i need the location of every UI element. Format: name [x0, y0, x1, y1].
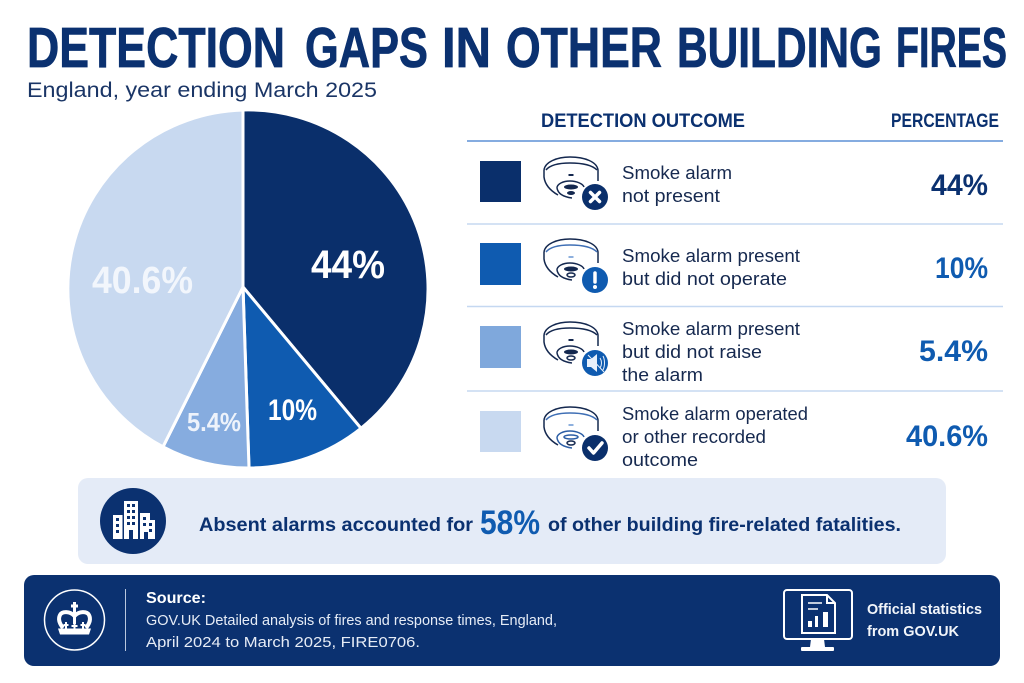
callout text: of other building fire-related fatalities. [548, 514, 901, 536]
title [27, 16, 1007, 80]
subtitle: England, year ending March 2025 [27, 79, 377, 102]
callout panel [78, 478, 946, 564]
row label: or other recorded [622, 426, 766, 447]
row label: but did not raise [622, 341, 762, 362]
swatch: navy [480, 161, 521, 202]
percentage 40.6%: 40.6% [906, 420, 988, 453]
title: GAPS [305, 16, 428, 80]
row label: but did not operate [622, 268, 787, 289]
swatch: mid blue [480, 326, 521, 368]
percentage 10%: 10% [935, 252, 988, 285]
icon: smoke alarm with check [544, 407, 608, 461]
table row: operated or other outcome [480, 403, 988, 470]
official statistics text: from GOV.UK [867, 623, 959, 640]
footer panel [24, 575, 1000, 666]
pie slice: did not raise alarm 5.4% [163, 287, 249, 468]
row label: Smoke alarm present [622, 245, 800, 266]
row label [622, 245, 800, 289]
source text: April 2024 to March 2025, FIRE0706. [146, 634, 420, 651]
source text: Source: [146, 590, 206, 607]
source text: GOV.UK Detailed analysis of fires and response times, England, [146, 612, 557, 629]
table header: detection outcome: DETECTION OUTCOME [541, 111, 745, 132]
pie slice: did not operate 10% [243, 287, 361, 468]
icon: smoke alarm with cross [544, 157, 608, 210]
pie label 44%: 44% [311, 243, 385, 287]
callout text: 58% [480, 504, 540, 542]
row label: Smoke alarm [622, 162, 732, 183]
official statistics text: Official statistics [867, 601, 982, 618]
row label: not present [622, 185, 720, 206]
source text [146, 590, 557, 651]
callout text: Absent alarms accounted for [199, 514, 473, 536]
row label: the alarm [622, 364, 703, 385]
official statistics text [867, 601, 982, 640]
row label: Smoke alarm operated [622, 403, 808, 424]
pie slice: not present 44% [243, 110, 428, 428]
title: OTHER [506, 16, 662, 80]
table header: percentage: PERCENTAGE [891, 111, 999, 132]
title: BUILDING [677, 16, 882, 80]
callout text [199, 504, 901, 542]
swatch: blue [480, 243, 521, 285]
icon: buildings [100, 488, 166, 554]
swatch: pale blue [480, 411, 521, 452]
title: DETECTION [27, 16, 285, 80]
icon: crown emblem [44, 590, 104, 650]
icon: smoke alarm with muted speaker [544, 322, 608, 376]
row label [622, 318, 800, 385]
table row: not present [480, 157, 988, 210]
pie chart [68, 110, 428, 468]
icon: smoke alarm with exclamation [544, 239, 608, 293]
row label [622, 162, 732, 206]
percentage 44%: 44% [931, 169, 988, 202]
title: IN [442, 16, 491, 80]
row label [622, 403, 808, 470]
table row: did not operate [480, 239, 988, 293]
pie label 40.6%: 40.6% [92, 260, 193, 302]
pie label 10%: 10% [268, 394, 317, 427]
pie label 5.4%: 5.4% [187, 407, 241, 437]
icon: monitor with report [784, 590, 852, 651]
pie slice: operated 40.6% [68, 110, 243, 447]
table row: did not raise the alarm [480, 318, 988, 385]
percentage 5.4%: 5.4% [919, 335, 988, 368]
row label: Smoke alarm present [622, 318, 800, 339]
row label: outcome [622, 449, 698, 470]
